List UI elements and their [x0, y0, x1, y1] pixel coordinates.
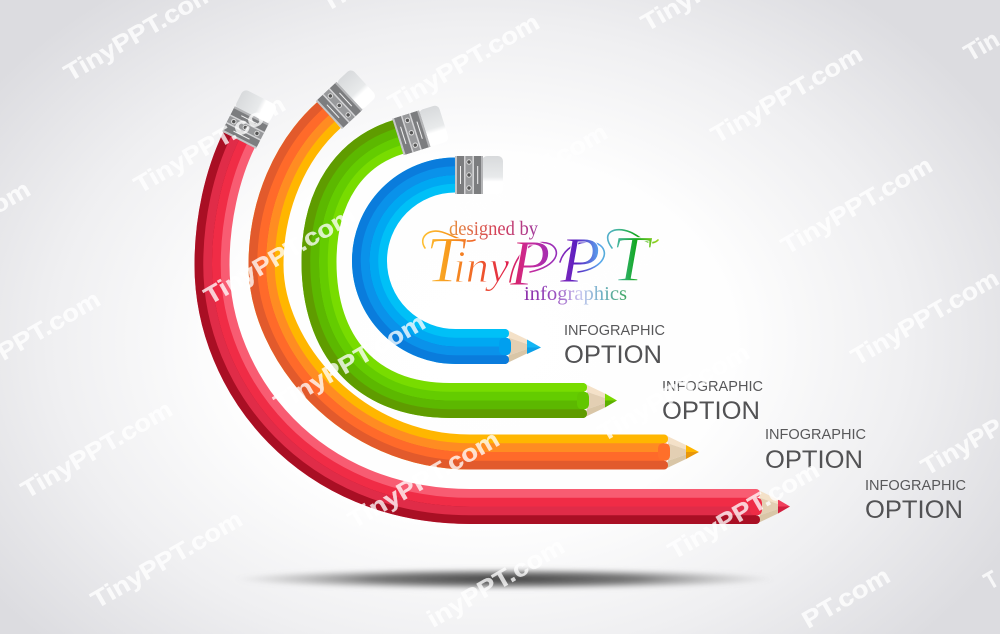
pencil: blue (inner): [369, 156, 541, 364]
label: orange option: [765, 426, 866, 474]
logo: designed by TinyPPT infographics: [423, 218, 658, 305]
label: red option: OPTION: [865, 496, 963, 524]
label: green option: [662, 378, 763, 425]
orange pencil tip: [658, 434, 699, 470]
ground shadow: [235, 568, 775, 590]
blue pencil body: [369, 175, 506, 347]
orange pencil body: [266, 115, 664, 452]
logo swashes: [423, 230, 658, 282]
pencil: red (outer): [212, 89, 790, 524]
watermarks: TinyPPT.com: [16, 396, 177, 504]
green pencil body: [319, 137, 584, 400]
label: blue option: [564, 322, 665, 369]
logo wordmark: T: [612, 223, 653, 296]
label: blue option: OPTION: [564, 341, 662, 369]
watermarks: PT.com: [798, 562, 895, 634]
watermarks: TinyPPT.com: [86, 506, 247, 614]
blue pencil tip: [499, 329, 541, 364]
watermarks: TinyPPT.com: [846, 265, 1000, 371]
watermarks: TinyPPT.com: [384, 9, 544, 117]
watermarks: TinyPPT.com: [776, 152, 937, 260]
watermarks: TinyPPT.com: [594, 339, 754, 447]
green pencil ferrule and eraser: [392, 104, 449, 155]
watermarks behind the logo: TinyPPT.com: [522, 229, 682, 337]
logo wordmark: iny: [453, 241, 510, 292]
orange pencil ferrule and eraser: [316, 68, 377, 129]
red pencil body: [212, 140, 756, 506]
label: green option: OPTION: [662, 397, 760, 425]
label: orange option: INFOGRAPHIC: [765, 426, 866, 443]
label: orange option: OPTION: [765, 446, 863, 474]
label: green option: INFOGRAPHIC: [662, 378, 763, 395]
watermarks: TinyPPT.com: [344, 426, 504, 534]
logo wordmark: P: [559, 224, 600, 297]
watermarks: TinyPPT.com: [706, 41, 867, 149]
logo wordmark: T: [426, 224, 467, 297]
watermarks: TinyPP: [916, 413, 1000, 481]
red pencil tip: [750, 489, 790, 524]
logo line: designed by: designed by: [449, 218, 538, 240]
watermarks: inyPPT.com: [422, 533, 569, 633]
label: red option: [865, 477, 966, 524]
logo line: infographics: infographics: [524, 283, 627, 305]
watermarks behind the logo: TinyPPT.com: [452, 119, 612, 227]
watermarks behind the logo: [452, 119, 682, 337]
watermarks: TinyPPT.com: [200, 202, 360, 310]
pencil: green: [319, 104, 617, 418]
watermarks: TinyPPT.com: [664, 457, 824, 565]
watermarks: TinyPPT.com: [130, 91, 290, 199]
watermarks: TinyPPT.com: [270, 309, 430, 417]
green pencil tip: [577, 383, 617, 418]
red pencil ferrule and eraser: [222, 89, 278, 149]
blue pencil ferrule and eraser: [455, 156, 503, 194]
pencil: orange: [266, 68, 699, 470]
logo wordmark: P: [509, 227, 550, 300]
label: blue option: INFOGRAPHIC: [564, 322, 665, 339]
label: red option: INFOGRAPHIC: [865, 477, 966, 494]
